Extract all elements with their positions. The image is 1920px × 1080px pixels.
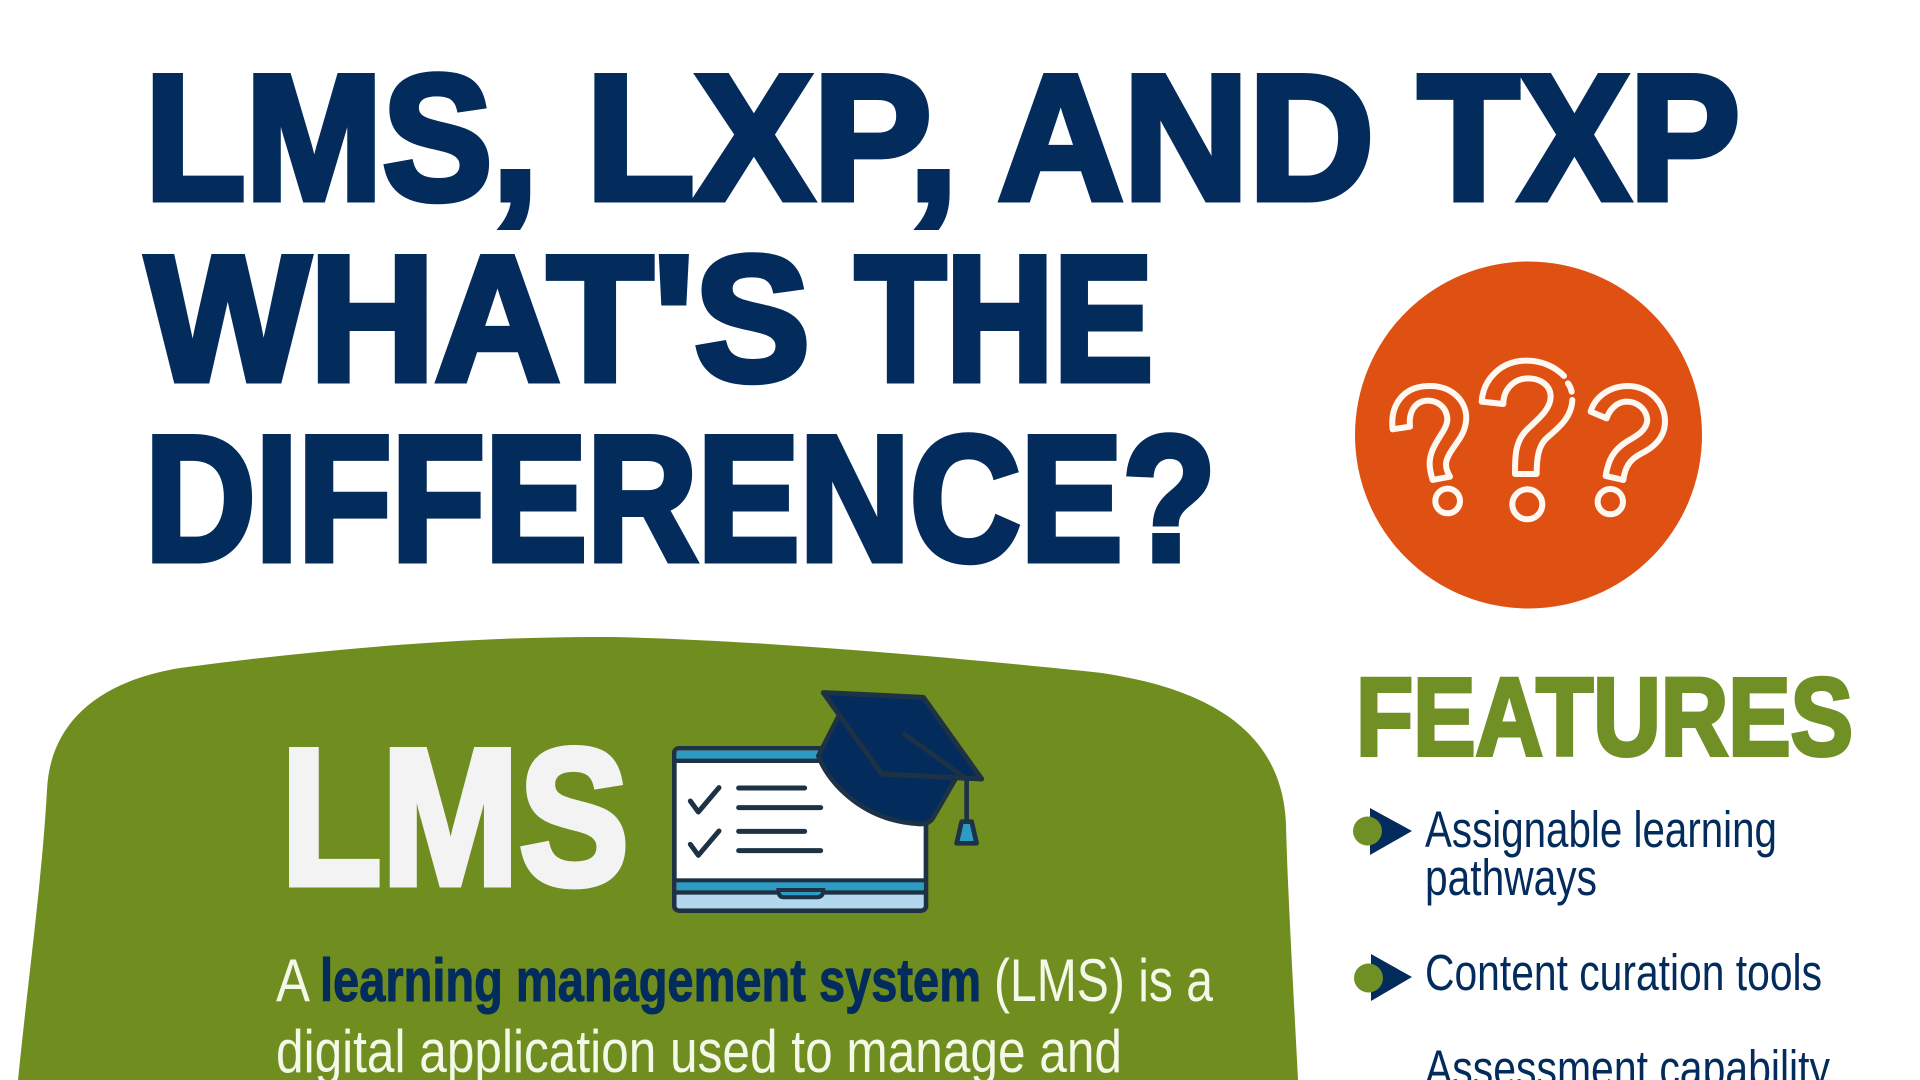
title: AND <box>998 38 1374 237</box>
feature: assignable learning pathways <box>1353 801 1777 906</box>
feature: content curation tools: Content curation tools <box>1425 944 1822 1001</box>
feature: assignable learning pathways: pathways <box>1425 849 1597 906</box>
title: THE <box>855 219 1153 418</box>
feature: assignable learning pathways: Assignable learning <box>1425 801 1777 858</box>
LMS description text <box>276 947 1214 1080</box>
LMS description text: learning management system <box>320 947 981 1014</box>
title: LXP, <box>586 38 958 237</box>
title: TXP <box>1418 38 1740 237</box>
panel background blob <box>18 637 1298 1080</box>
title <box>145 38 1740 598</box>
LMS description text: A <box>276 947 310 1014</box>
icon: laptop with graduation cap <box>674 693 982 911</box>
title: LMS, <box>145 38 538 237</box>
LMS description text: (LMS) is a <box>994 947 1214 1014</box>
LMS heading: LMS <box>281 709 629 926</box>
panel: LMS <box>18 637 1298 1080</box>
title: DIFFERENCE? <box>145 399 1216 598</box>
title: WHAT'S <box>146 219 810 418</box>
icon: question marks in orange circle <box>1355 262 1702 608</box>
